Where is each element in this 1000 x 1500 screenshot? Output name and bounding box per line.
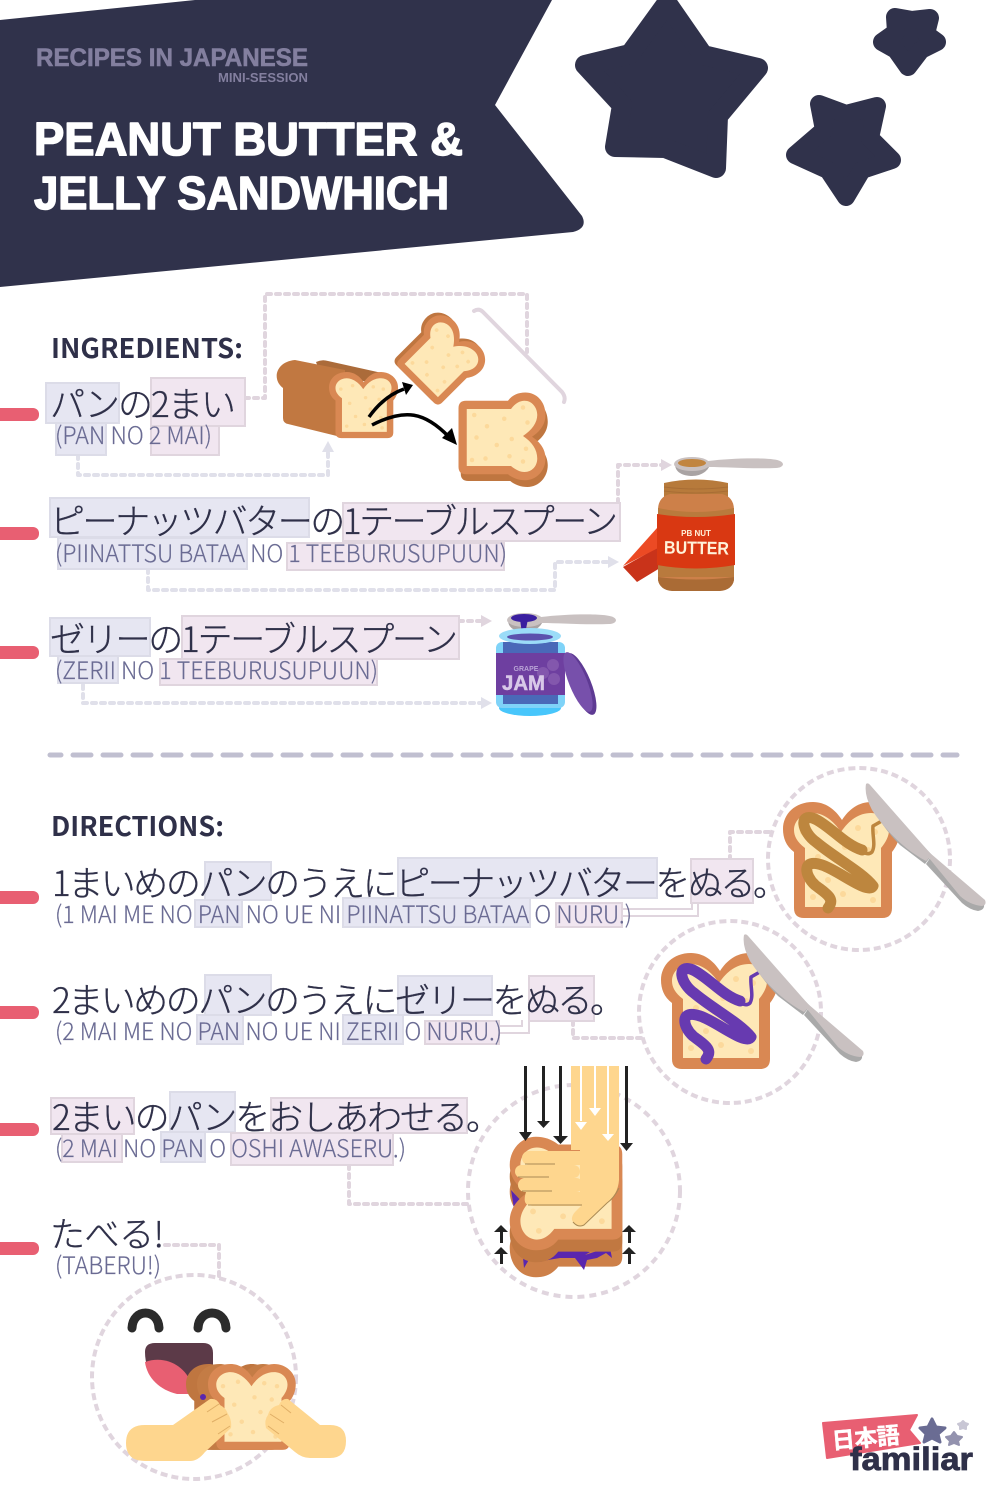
ingredient 1 japanese: パンの2まい [50,377,236,428]
large star decoration [585,3,758,168]
small star decoration [882,17,937,67]
ingredient 3 japanese: ゼリーの1テーブルスプーン [50,612,458,663]
icon: peanut butter jar [623,480,735,591]
circle: step 1 [768,768,950,950]
ingredient 3 romaji: (ZERII NO 1 TEEBURUSUPUUN) [55,651,378,686]
bullet 1 [0,408,39,421]
circle: step 2 [639,921,821,1103]
series label: RECIPES IN JAPANESE [36,44,308,72]
step 2 romaji: (2 MAI ME NO PAN NO UE NI ZERII O NURU.) [55,1012,502,1047]
step 2 double link [499,1020,529,1033]
logo: familiar [850,1441,973,1477]
logo: 日本語 [830,1416,901,1456]
divider [50,752,957,758]
step 1 romaji: (1 MAI ME NO PAN NO UE NI PIINATTSU BATAA O NURU.) [55,895,632,930]
icon: happy eating face [126,1313,346,1461]
step 4 romaji: (TABERU!) [55,1246,161,1281]
step 2 connector [573,1021,642,1038]
medium star decoration [795,104,892,197]
circle: step 4 [92,1275,296,1479]
step 4 connector [165,1245,219,1278]
arrow: slice down [372,415,457,445]
icon: peanut butter spoon [674,457,783,476]
step 2 japanese: 2まいめのパンのうえにゼリーをぬる。 [52,973,625,1024]
ingredient 1 romaji: (PAN NO 2 MAI) [55,416,212,451]
step 3 highlights [51,1092,467,1165]
step 1 connector [730,832,773,860]
connector: bread word [78,441,334,475]
icon: jam spoon [507,613,616,634]
bullet 6 [0,1123,39,1136]
icon: toast with jelly [661,934,864,1069]
heading: ingredients: INGREDIENTS: [51,327,243,366]
icon: bread slice one [388,306,492,410]
ingredient 2 japanese: ピーナッツバターの1テーブルスプーン [50,494,618,545]
bullet 3 [0,646,39,659]
logo [823,1415,973,1477]
ingredient 3 highlights [50,616,459,685]
header banner [0,0,584,287]
title: PEANUT BUTTER & [34,113,463,165]
title: JELLY SANDWHICH [34,167,449,219]
step 1 japanese: 1まいめのパンのうえにピーナッツバターをぬる。 [52,856,788,907]
icon: bread slice two [458,392,548,487]
sub series label: MINI-SESSION [218,70,308,85]
bullet 2 [0,527,39,540]
ingredient 2 highlights [50,498,620,570]
icon: peanut butter jar: PB NUT [681,529,711,538]
bullet 4 [0,891,39,904]
bullet 7 [0,1242,39,1255]
bullet 5 [0,1006,39,1019]
connector: butter amount [618,459,672,503]
icon: peanut butter jar: BUTTER [664,537,729,559]
ingredient 1 highlights [46,378,245,455]
step 3 connector [349,1165,467,1204]
title [34,113,463,219]
connector: jelly amount [459,615,492,627]
step 4 japanese: たべる! [50,1207,164,1258]
connector: bread amount [245,294,527,398]
step 3 japanese: 2まいのパンをおしあわせる。 [52,1090,501,1141]
arrow: slice up [369,382,413,417]
cutting board line [474,310,565,402]
icon: jam jar: JAM [502,672,545,695]
icon: toast with peanut butter [783,783,986,918]
ingredient 2 romaji: (PIINATTSU BATAA NO 1 TEEBURUSUPUUN) [55,534,507,569]
icon: jam jar [496,628,603,718]
icon: pressing sandwich [494,1066,636,1277]
icon: jam jar: GRAPE [514,666,539,673]
step 1 highlights [195,858,753,927]
step 2 highlights [197,975,594,1044]
heading: directions: DIRECTIONS: [51,805,224,844]
connector: jelly word [83,685,492,709]
connector: butter word [148,556,619,590]
icon: bread loaf [277,360,398,438]
circle: step 3 [468,1085,680,1297]
step 3 romaji: (2 MAI NO PAN O OSHI AWASERU.) [55,1129,406,1164]
step 1 double link [622,900,698,916]
